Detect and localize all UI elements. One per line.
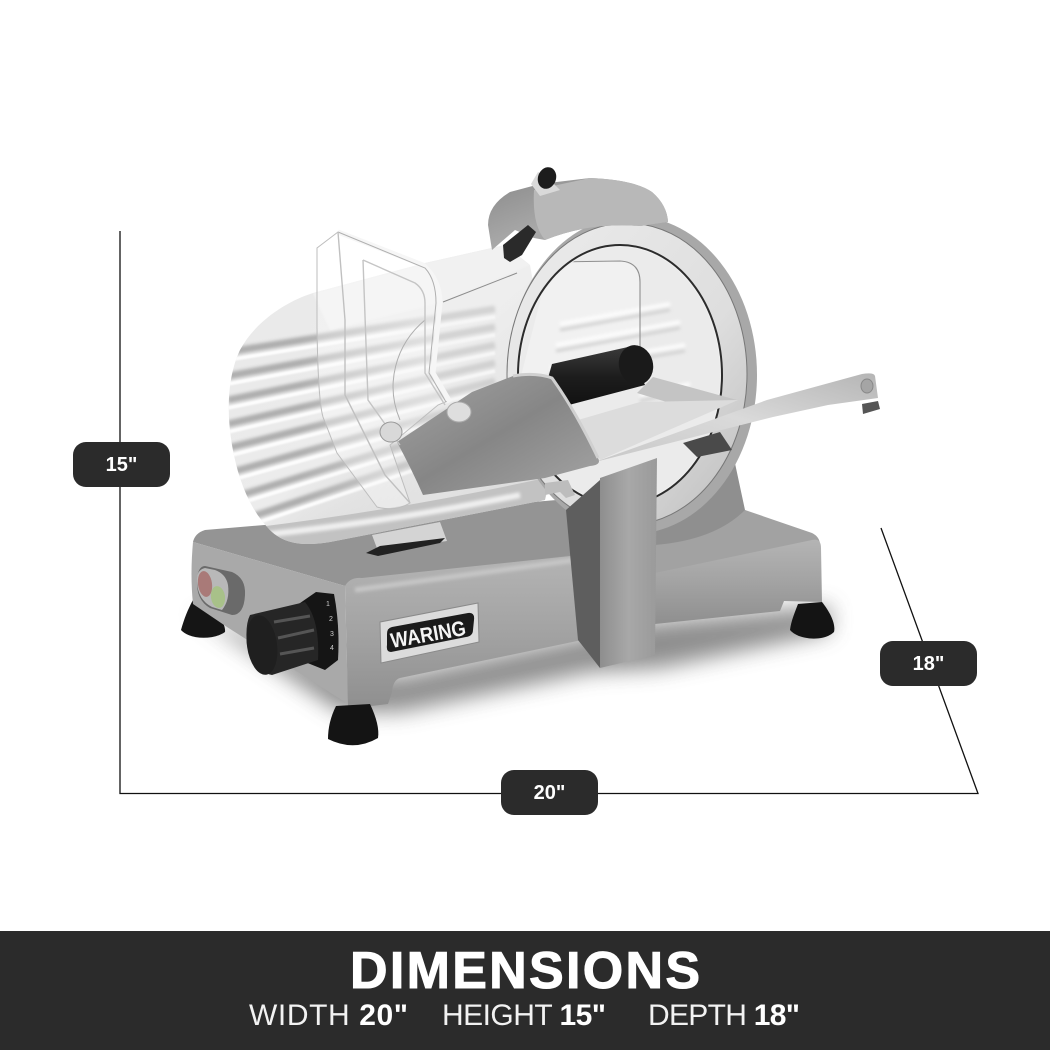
label: 18 inch depth: 18": [913, 653, 944, 675]
column front face: [600, 458, 657, 668]
hood latch: [503, 225, 536, 262]
rear left foot: [181, 600, 225, 638]
label: 20 inch width: [501, 770, 598, 815]
base left end face: [192, 542, 348, 704]
guard bolts: [380, 402, 471, 442]
label: 15 inch height: 15": [106, 454, 137, 476]
top blade hood: [488, 178, 668, 250]
carriage ribbed shelf: [578, 400, 738, 460]
base front face: [345, 555, 582, 708]
left base top surface: [193, 498, 580, 586]
right base top surface: [655, 510, 820, 577]
width summary: WIDTH 20": [249, 999, 408, 1032]
heading: dimensions: DIMENSIONS: [350, 942, 700, 1000]
thickness dial: 4: [330, 645, 334, 652]
label: 20 inch width: 20": [534, 782, 565, 804]
front foot: [328, 704, 378, 745]
carriage rim highlight: [513, 374, 598, 458]
thickness dial: 2: [329, 616, 333, 623]
hood front face: [534, 178, 668, 240]
lever under arm: [683, 432, 732, 457]
fluted product tray: [228, 245, 560, 550]
Waring badge: [380, 603, 479, 663]
height summary: HEIGHT 15": [442, 999, 606, 1032]
column side face: [566, 480, 600, 668]
Waring badge: WARING: [389, 617, 468, 653]
blade guard outer ring: [507, 216, 757, 534]
product photo: meat slicer: [181, 165, 880, 745]
motor housing behind blade: [640, 440, 760, 580]
clear plastic guard: [317, 232, 450, 509]
label: 15 inch height: [73, 442, 170, 487]
slicer ground shadow: [190, 606, 830, 712]
bottom dimensions banner: [0, 931, 1050, 1050]
blade disc with ribs: [548, 260, 686, 402]
label: 18 inch depth: [880, 641, 977, 686]
top knob: [531, 165, 560, 196]
right base front face: [655, 540, 822, 624]
blade inner ring: [518, 245, 722, 505]
depth summary: DEPTH 18": [648, 999, 800, 1032]
thickness dial: 3: [330, 631, 334, 638]
rear right foot: [790, 602, 834, 639]
gray food carriage: [397, 374, 599, 495]
handle black: [548, 341, 658, 406]
blade guard light ring: [507, 223, 747, 525]
bolt on carriage mount: [545, 480, 575, 498]
base front hump highlight: [355, 560, 575, 590]
pusher arm behind carriage: [637, 377, 737, 410]
power switch: [196, 566, 245, 615]
arm end pivot: [861, 379, 880, 414]
thickness dial: [243, 592, 338, 677]
carriage silver arm: [595, 373, 878, 462]
thickness dial: 1: [326, 601, 330, 608]
tray bracket: [366, 522, 447, 556]
dimension lines: [120, 231, 978, 794]
